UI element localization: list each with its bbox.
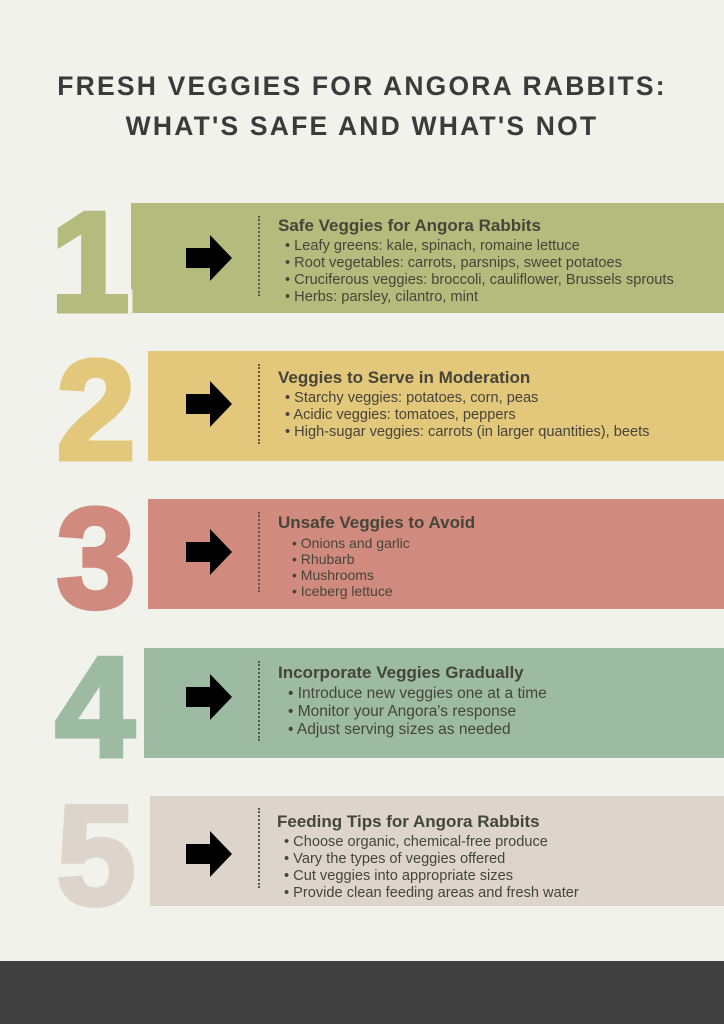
text block: Cruciferous veggies: broccoli, cauliflower, Brussels sprouts (294, 272, 674, 288)
text block: Feeding Tips for Angora Rabbits (277, 812, 540, 831)
title: WHAT'S SAFE AND WHAT'S NOT (126, 111, 598, 141)
text block: Cut veggies into appropriate sizes (293, 868, 513, 884)
title (57, 71, 667, 141)
text block: Introduce new veggies one at a time (298, 685, 547, 702)
text block: Rhubarb (301, 551, 354, 567)
text block (277, 812, 579, 901)
text block: Incorporate Veggies Gradually (278, 663, 524, 682)
text block: Adjust serving sizes as needed (297, 721, 511, 738)
text block: Acidic veggies: tomatoes, peppers (293, 407, 516, 423)
text block: Mushrooms (301, 567, 374, 583)
text block (278, 663, 547, 738)
icon: arrow (186, 831, 232, 877)
title: FRESH VEGGIES FOR ANGORA RABBITS: (57, 71, 667, 101)
text block: Iceberg lettuce (301, 583, 393, 599)
icon: arrow (186, 381, 232, 427)
icon: arrow (186, 529, 232, 575)
text block (278, 216, 674, 305)
panel: unsafe (57, 499, 724, 619)
text block: Root vegetables: carrots, parsnips, sweet potatoes (294, 255, 622, 271)
text block: Vary the types of veggies offered (293, 851, 505, 867)
panel: feeding tips (57, 796, 724, 916)
text block (278, 368, 649, 440)
text block: Veggies to Serve in Moderation (278, 368, 530, 387)
text block: Leafy greens: kale, spinach, romaine lettuce (294, 238, 580, 254)
icon: arrow (186, 235, 232, 281)
text block: Unsafe Veggies to Avoid (278, 513, 475, 532)
text block: Provide clean feeding areas and fresh water (293, 885, 579, 901)
panel: safe veggies (51, 203, 724, 323)
icon: arrow (186, 674, 232, 720)
text block: Monitor your Angora's response (298, 703, 516, 720)
text block (278, 513, 475, 599)
text block: Safe Veggies for Angora Rabbits (278, 216, 541, 235)
text block: Onions and garlic (301, 535, 410, 551)
text block: Herbs: parsley, cilantro, mint (294, 289, 478, 305)
text block: High-sugar veggies: carrots (in larger quantities), beets (294, 424, 649, 440)
panel: gradually (55, 648, 724, 768)
panel: moderation (57, 351, 724, 471)
text block: Starchy veggies: potatoes, corn, peas (294, 390, 538, 406)
footer (0, 961, 724, 1024)
text block: Choose organic, chemical-free produce (293, 834, 548, 850)
